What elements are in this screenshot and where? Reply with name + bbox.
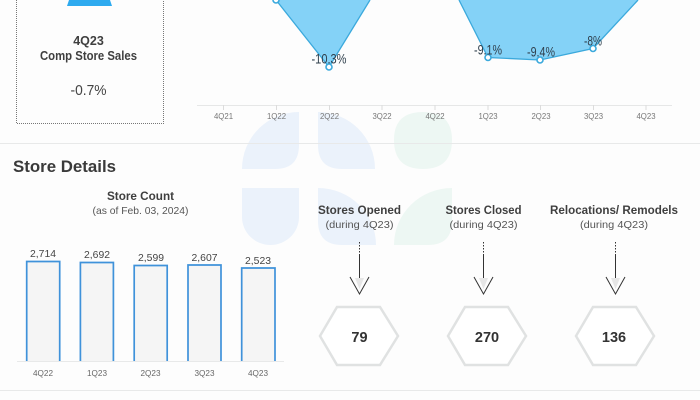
quarter labels: 4Q22: [33, 369, 53, 378]
sublabel: (during 4Q23): [450, 219, 518, 231]
axis: [17, 361, 284, 362]
x axis: 3Q22: [372, 112, 392, 121]
icon: blue bag base: [67, 0, 112, 6]
x axis: 4Q21: [214, 112, 233, 121]
panel: store count bar chart: [17, 189, 284, 378]
arrow: [350, 242, 369, 294]
hexagon value: 270: [475, 330, 499, 346]
quarter labels: 1Q23: [87, 369, 107, 378]
sublabel: (during 4Q23): [326, 219, 394, 231]
hexagon value: [320, 307, 398, 365]
bar values: 2,714: [30, 248, 56, 260]
bar values: 2,523: [245, 255, 271, 267]
quarter labels: [33, 369, 268, 378]
data labels: -10.3%: [312, 50, 346, 66]
x axis: [197, 105, 672, 121]
label: Relocations/ Remodels: [550, 203, 678, 217]
quarter labels: 4Q23: [248, 369, 268, 378]
arrow: [606, 242, 625, 294]
heading: store details: Store Details: [13, 157, 116, 176]
arrow: [474, 242, 493, 294]
x axis: 2Q23: [531, 112, 551, 121]
comp sales value: -0.7%: [70, 82, 106, 99]
x axis: 4Q23: [636, 112, 656, 121]
data markers: [273, 0, 596, 70]
hexagon value: 136: [602, 330, 626, 346]
hexagon value: [448, 307, 526, 365]
quarter labels: 3Q23: [194, 369, 215, 378]
sublabel: (during 4Q23): [580, 219, 648, 231]
dividers: [0, 143, 700, 391]
comp sales label line 2: Comp Store Sales: [40, 49, 137, 63]
panel: stores opened: [318, 203, 401, 365]
comp sales label: 4Q23: [73, 34, 104, 48]
data labels: -9.1%: [474, 42, 502, 58]
x axis: 1Q22: [267, 112, 286, 121]
panel: relocations and remodels: [550, 203, 678, 365]
panel: stores closed: [446, 203, 526, 365]
panel: 4Q23 comp store sales: [16, 0, 164, 124]
x axis: 4Q22: [425, 112, 445, 121]
label: Stores Closed: [446, 203, 522, 217]
data labels: [312, 32, 602, 66]
bar values: 2,607: [192, 252, 218, 264]
data labels: -8%: [584, 32, 602, 48]
bar values: 2,599: [138, 252, 164, 264]
x axis: 3Q23: [584, 112, 603, 121]
hexagon value: 79: [351, 330, 368, 346]
hexagon value: [576, 307, 654, 365]
x axis: 2Q22: [320, 112, 339, 121]
area chart: comp store sales by quarter: [197, 0, 672, 121]
chart title: Store Count: [107, 189, 174, 203]
label: Stores Opened: [318, 203, 401, 217]
watermark logo: [242, 112, 452, 245]
quarter labels: 2Q23: [140, 369, 161, 378]
data labels: -9.4%: [527, 44, 555, 60]
bars: [27, 262, 275, 361]
chart subtitle: (as of Feb. 03, 2024): [92, 205, 188, 217]
x axis: 1Q23: [478, 112, 498, 121]
bar values: [30, 248, 271, 267]
bar values: 2,692: [84, 249, 110, 261]
